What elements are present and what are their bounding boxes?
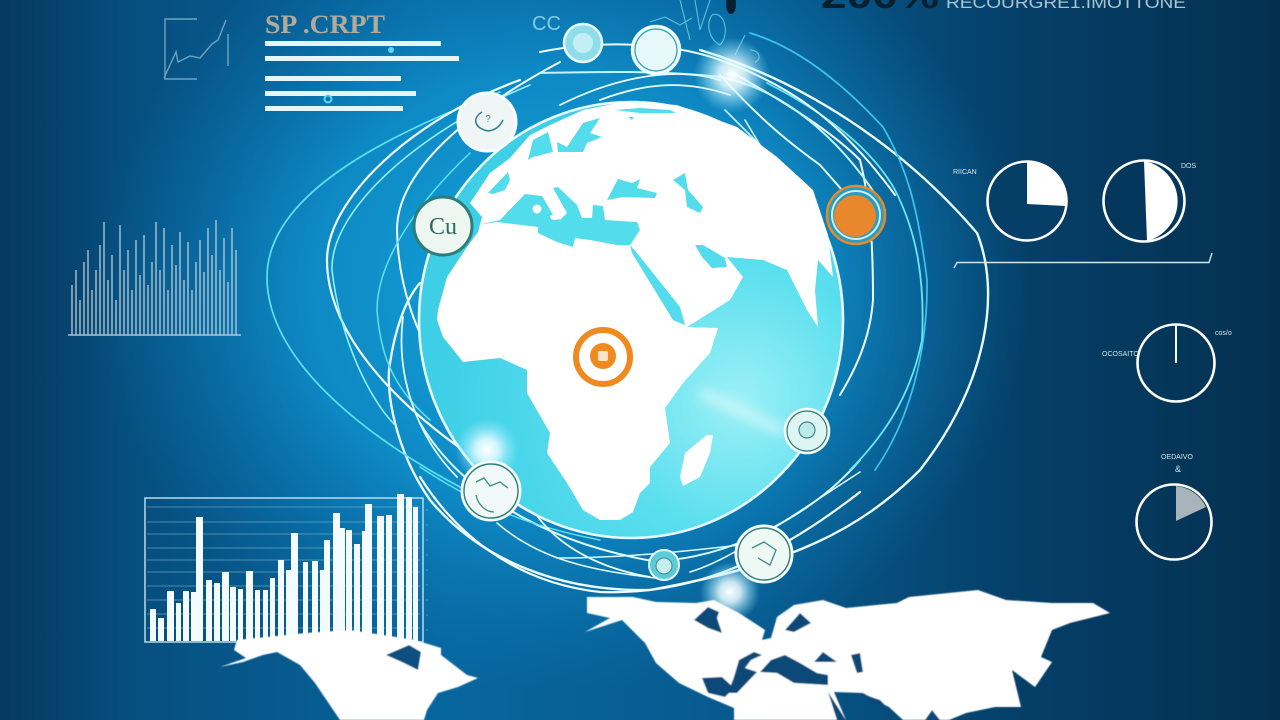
pie chart: small slice [1136,484,1212,560]
gauge label right: cos/o [1215,330,1232,337]
gauge label left: OCOSAITO [1102,351,1139,358]
pie label right: DOS [1181,163,1196,170]
icon: top pin [726,0,736,14]
node: left: Cu [429,214,457,240]
node: lower left [462,462,520,520]
text block: placeholder lines [265,41,459,111]
pie label symbol: & [1175,464,1181,474]
chart: bar chart with grid [145,494,432,642]
island: Madagascar [680,435,713,486]
node: top small [564,24,602,62]
seas: dark overlays [694,607,940,720]
pie chart: quarter [988,161,1066,240]
light flares [455,37,785,622]
node: upper left [458,93,516,151]
node: top large [632,26,680,74]
node: upper left: ? [485,114,491,125]
bracket line [954,253,1212,268]
lake: Hudson bay left [386,645,421,670]
node: lower right small [785,409,829,453]
bottom world map: left [220,630,478,720]
globe [419,102,843,538]
pie label top: OEDAIVO [1161,454,1193,461]
icon: small line chart [164,19,228,79]
heading: title text: SP .CRPT [265,10,385,39]
node: bottom right [736,526,792,582]
node: orange [827,186,885,244]
pie chart: half [1104,160,1184,242]
icon: scribbles at top [650,0,759,62]
node: bottom small [649,550,679,580]
pie label left: RIICAN [953,169,977,176]
bottom world map: right [585,590,1110,720]
seas: cyan overlays [478,108,727,325]
node: left [414,197,472,255]
continent: Africa and Eurasia [437,102,833,520]
chart: left histogram [68,220,241,335]
orbit lines [267,33,988,592]
marker: orange target [576,330,630,384]
islands: Mediterranean [532,204,560,220]
gauge: upper [1138,324,1214,402]
text: top label: CC [532,13,561,35]
